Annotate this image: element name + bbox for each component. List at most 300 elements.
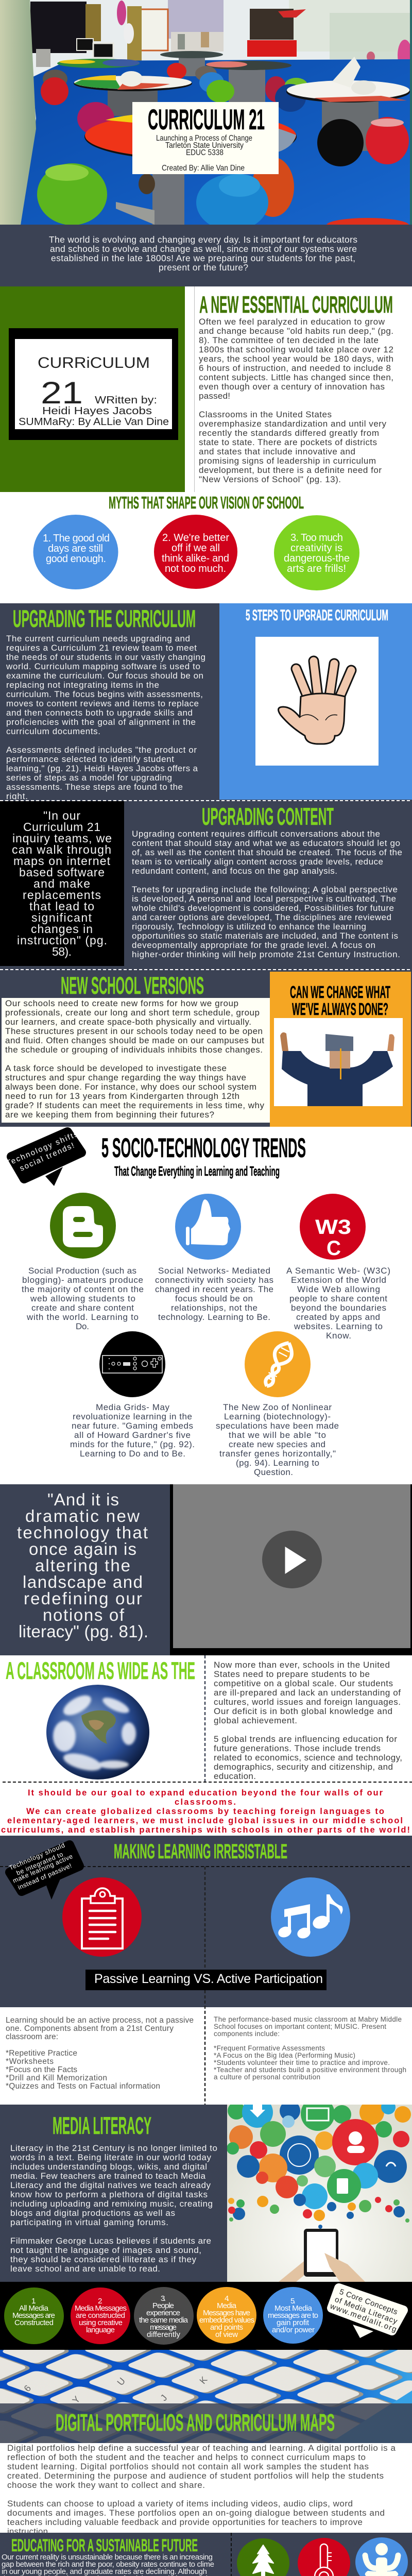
text: passive learning: *Drill and Kill Memorization (6, 2074, 107, 2082)
text: social production: the majority of content on the (22, 1284, 144, 1294)
callout: technology shifts: Technology shifts (5, 1130, 79, 1168)
concept 1: All Media (19, 2304, 49, 2313)
body text: grade? If students can meet the requirements in less time, why (5, 1100, 265, 1110)
icon: blogger (50, 1193, 116, 1259)
panel: digital portfolios keyboard banner: U (115, 2376, 127, 2387)
text: digital portfolios: choose the work they want to collect and share. (7, 2480, 205, 2490)
panel: quote in our curriculum 21: replacements (23, 888, 101, 902)
concept 4 (197, 2287, 256, 2344)
body text: structures and spur change regarding the way things have (5, 1073, 246, 1082)
body text: curriculum. The focus begins with assessments, (6, 689, 203, 699)
callout: technology integrated (8, 1842, 79, 1900)
concept 4: of view (215, 2330, 238, 2339)
panel: 5 steps (219, 603, 412, 800)
callout: 5 core concepts: 5 Core Concepts (338, 2287, 399, 2316)
concept 4: 4. (225, 2294, 229, 2303)
callout: technology integrated: make learning active (12, 1853, 74, 1885)
text: social networks: relationships, not the (171, 1303, 258, 1313)
text: semantic web: A Semantic Web- (W3C) (286, 1266, 390, 1276)
body text: Filmmaker George Lucas believes if students are (10, 2236, 211, 2246)
body text: and career options are developed, The disciplines are reviewed (132, 912, 391, 922)
panel: intro band (0, 225, 412, 286)
panel: quote in our curriculum 21: significant (31, 911, 92, 924)
panel: literacy quote: redefining our (24, 1589, 142, 1608)
body text: 5 global trends are influencing education for (214, 1734, 397, 1744)
concept 1: Messages are (12, 2311, 55, 2320)
callout: global goal (1, 1788, 410, 1835)
myth 3 circle: 3. Too much (290, 532, 343, 544)
text: social production: blogging)- amateurs produce (22, 1275, 143, 1285)
body text: the schedule or grouping of individuals inhibits those changes. (5, 1045, 263, 1055)
body text: the needs of our students in our vastly changing (6, 652, 205, 662)
text: media grids: Learning to Do and to Be. (80, 1449, 185, 1459)
concept 2: 2. (98, 2297, 102, 2306)
myth 2 circle: not too much. (165, 563, 226, 574)
concept 2: using creative (79, 2318, 123, 2327)
body text: competitive on a global scale. Our students (214, 1679, 393, 1688)
book title text: WRitten by: (95, 395, 157, 406)
panel: literacy quote: landscape and (23, 1572, 143, 1591)
body text: replacing not integrating items in the (6, 680, 159, 690)
body text (131, 829, 402, 959)
body text: examine the curriculum. Our focus should be on (6, 671, 203, 681)
media icons image (227, 2097, 412, 2282)
body text: even though over a century of innovation has (199, 382, 385, 392)
callout: global goal: It should be our goal to expand education beyond the four walls of our (28, 1788, 383, 1798)
body text: 6 hours of instruction, and needed to include 8 (199, 363, 391, 373)
text: media grids (70, 1402, 195, 1459)
text: passive learning: *Quizzes and Tests on Factual information (6, 2082, 160, 2091)
text: new zoo: create new species and (229, 1439, 325, 1449)
myth 2 circle (154, 515, 237, 589)
intro text (49, 234, 357, 273)
body text: media. Few teachers are trained to teach Media (10, 2171, 206, 2181)
body text: whole child's development is considered, Possibilities for future (131, 903, 394, 913)
body text (10, 2143, 217, 2274)
panel: quote in our curriculum 21: 58). (52, 945, 72, 958)
icon: w3c: W3 (315, 1216, 351, 1239)
subtitle text: Created By: Allie Van Dine (162, 164, 245, 173)
banner: passive vs active (85, 1970, 327, 1990)
concept 4: Messages have (203, 2309, 250, 2317)
panel: can we change (270, 972, 411, 1127)
concept 3: 3. (161, 2294, 166, 2303)
text: media grids: minds for the future," (pg. 92). (70, 1439, 195, 1449)
body text (1, 2553, 218, 2576)
concept 4: Media (217, 2301, 237, 2310)
body text: series of steps as a model for upgrading (6, 773, 172, 783)
panel: literacy quote (0, 1484, 170, 1655)
myth 1 circle: days are still (48, 543, 103, 554)
panel: quote in our curriculum 21: Curriculum 21 (23, 820, 100, 834)
concept 5 (263, 2287, 323, 2344)
text: new zoo: Learning (biotechnology)- (224, 1412, 331, 1421)
body text: development, but there is a definite need for (199, 465, 382, 475)
panel: media literacy: MEDIA LITERACY (53, 2112, 151, 2139)
concept 5: Most Media (274, 2304, 313, 2313)
text: active participation: *Students volunteer their time to practice and improve. (214, 2059, 390, 2066)
body text: and then connects both to upgrade skills and (6, 708, 193, 718)
callout: 5 core concepts (329, 2287, 403, 2338)
myth 2 circle: off if we all (171, 543, 220, 554)
panel: literacy quote: technology that (17, 1523, 148, 1542)
icon: tree (237, 2538, 289, 2576)
text: active participation: components include: (214, 2030, 280, 2038)
body text: Tenets for upgrading include the following; A global perspective (132, 885, 398, 894)
book title text: Heidi Hayes Jacobs (42, 405, 152, 417)
text: digital portfolios: reflection of both the student and the teacher and helps to connect curriculum maps to (7, 2452, 366, 2462)
panel: quote in our curriculum 21: inquiry teams, we (12, 832, 112, 845)
body text: The current curriculum needs upgrading and (6, 634, 190, 643)
video placeholder (170, 1484, 412, 1655)
text: new zoo: (pg. 94). Learning to (236, 1458, 319, 1468)
body text (214, 1660, 402, 1781)
text: active participation: *Teacher and students build a positive environment through (214, 2066, 406, 2074)
text: digital portfolios: student learning. Digital portfolios should not contain all work samples the student has (7, 2462, 369, 2471)
body text (199, 317, 393, 484)
intro text: established in the late 1800s! Are we preparing our students for the past, (51, 253, 355, 263)
callout: technology integrated: be integrated to (15, 1851, 64, 1877)
body text: rigorously, Technology is utilized to enhance the learning (132, 922, 366, 931)
icon: meditating person (355, 2537, 408, 2576)
text: media grids: Media Grids- May (96, 1402, 170, 1412)
panel: quote in our curriculum 21 (0, 801, 124, 966)
panel: upgrading content (131, 803, 402, 959)
myth 3 circle (274, 515, 359, 590)
concept 2 (71, 2287, 130, 2344)
text: media grids: revoluationize learning in the (73, 1412, 192, 1421)
body text: our learners, and create space-both physically and virtually. (5, 1017, 251, 1027)
body text: learning," (pg. 21). Heidi Hayes Jacobs offers a (6, 764, 198, 773)
body text: professionals, create our long and short term schedule, group (5, 1008, 260, 1018)
text: social production: with the world. Learning to (26, 1312, 139, 1322)
body text: and change because "old habits run deep," (pg. (199, 326, 393, 336)
icon: thumbs up (175, 1194, 241, 1260)
body text: 8). The committee of ten decided in the late (199, 335, 379, 345)
text: active participation: *Frequent Formative Assessments (214, 2044, 325, 2052)
title card (132, 102, 279, 174)
text: social networks: changed in recent years. The (155, 1284, 273, 1294)
icon: music notes (271, 1877, 350, 1957)
text: passive learning: one. Components absent from a 21st Century (6, 2024, 174, 2033)
book title text (19, 354, 169, 428)
text: social production: Social Production (such as (28, 1266, 136, 1276)
book title text: SUMMaRy: By ALLie Van Dine (19, 416, 169, 428)
body text: requires a Curriculum 21 review team to meet (6, 643, 197, 653)
body text: assessments. These steps are found to the (6, 782, 183, 792)
body text: Often we feel paralyzed in education to grow (199, 317, 385, 327)
panel: quote in our curriculum 21: maps on internet (13, 854, 111, 868)
callout: technology integrated: instead of passive! (17, 1862, 73, 1891)
panel: digital portfolios keyboard banner: J (158, 2393, 169, 2403)
myth 2 circle: think alike- and (162, 553, 229, 564)
callout: global goal: classrooms. (175, 1798, 236, 1807)
panel: quote in our curriculum 21: changes in (31, 922, 93, 936)
text: active participation (214, 2015, 406, 2081)
concept 3: differently (147, 2330, 180, 2339)
book title text: CURRiCULUM (38, 354, 150, 371)
body text: These structures present in our schools today need to be open (5, 1026, 263, 1036)
body text: 1800s that schooling would take place over 12 (199, 345, 393, 354)
intro text: and schools to evolve and change as well, since most of our systems were (50, 244, 357, 254)
subtitle text (156, 134, 252, 173)
body text: moves to content reviews and items to replace (6, 699, 199, 708)
icon: clipboard (62, 1877, 142, 1957)
graduate photo (280, 1032, 394, 1106)
text: social networks: technology. Learning to Be. (158, 1312, 270, 1322)
panel: making learning irresistable (0, 1836, 412, 2105)
divider (3, 1782, 412, 1783)
body text: A task force should be developed to investigate these (5, 1063, 227, 1073)
text: social production: Do. (76, 1321, 89, 1331)
panel: 5 core concepts (0, 2282, 412, 2350)
body text: Now more than ever, schools in the United (214, 1660, 390, 1670)
body text: leave school and are unable to read. (10, 2264, 160, 2274)
icon: thermometer (298, 2538, 350, 2576)
text: semantic web: websites. Learning to (294, 1321, 383, 1331)
myth 3 circle: arts are frills! (287, 563, 346, 574)
text: social networks: Social Networks- Mediated (158, 1266, 270, 1276)
body text: future generations. Those include trends (214, 1743, 381, 1753)
text: digital portfolios: instruction. (7, 2527, 50, 2536)
body text: Literacy in the 21st Century is no longer limited to (10, 2143, 217, 2153)
text: digital portfolios: Students can choose to upload a variety of items including videos, audio clips, word (7, 2499, 353, 2509)
body text: "New Versions of School" (pg. 13). (199, 474, 341, 484)
callout: 5 core concepts: of Media Literacy (334, 2295, 399, 2326)
intro text: present or the future? (159, 262, 248, 273)
text: digital portfolios (7, 2443, 396, 2536)
panel: literacy quote: "And it is (47, 1490, 119, 1509)
body text: curriculum documents. (6, 726, 100, 736)
body text: state to state. There are pockets of districts (199, 437, 377, 447)
body text: participating in virtual gaming forums. (10, 2217, 168, 2227)
subtitle text: Tarleton State University (165, 141, 244, 150)
body text: proficiencies with the goal of alignment in the (6, 717, 196, 727)
panel: new school versions (2, 972, 270, 1123)
myth 2 circle: 2. We're better (162, 532, 229, 544)
text: active participation: a culture of personal contribution (214, 2073, 320, 2081)
body text: not taught the language of images and sound, (10, 2245, 201, 2255)
concept 5: 5. (290, 2297, 296, 2306)
text: social networks (155, 1266, 273, 1322)
body text: passed! (199, 391, 230, 401)
panel: quote in our curriculum 21: based software (19, 866, 105, 879)
subtitle text: Launching a Process of Change (156, 134, 252, 143)
title card: CURRICULUM 21 (148, 103, 265, 135)
text: semantic web (286, 1266, 390, 1341)
text: passive learning: *Worksheets (6, 2057, 54, 2066)
concept 2: are constructed (76, 2311, 125, 2320)
text: social networks: focus should be on (175, 1294, 253, 1303)
dark background for content block (0, 800, 412, 1127)
body text (5, 998, 265, 1120)
callout: technology integrated: Technology should (8, 1842, 66, 1872)
concept 2: language (86, 2326, 115, 2334)
text: new zoo: Question. (254, 1467, 293, 1477)
callout: global goal: curriculums, and establish partnerships with schools in other parts of the world! (1, 1825, 410, 1835)
icon: w3c (300, 1194, 366, 1260)
icon: play button (262, 1531, 322, 1588)
text: new zoo: speculations have been made (216, 1421, 339, 1431)
panel: a new essential curriculum (195, 286, 393, 492)
body text: world. Curriculum mapping software is used to (6, 662, 200, 671)
body text: opportunities so static materials are included, and The content is (132, 931, 398, 941)
intro text: The world is evolving and changing every day. Is it important for educators (49, 234, 357, 245)
text: digital portfolios: Digital portfolios help define a successful year of teaching and learning. A digital portfolio is a (7, 2443, 396, 2453)
body text: are ill-prepared and lack an understanding of (214, 1688, 401, 1698)
body text: right. (6, 791, 28, 801)
text: digital portfolios: documents and images. These portfolios open an on-going dialogue between students and (7, 2508, 385, 2518)
icon: game remote (99, 1331, 165, 1397)
text: semantic web: Know. (326, 1331, 351, 1341)
body text: and fluid. Often changes should be made on our campuses but (5, 1036, 264, 1045)
concept 3: People (152, 2301, 174, 2310)
concept 1: Constructed (14, 2318, 54, 2327)
body text: gap between the rich and the poor, obesity rates continue to clime (2, 2560, 214, 2569)
text: passive learning (6, 2016, 194, 2091)
body text: Assessments defined includes "the product or (6, 745, 197, 755)
panel: upgrading the curriculum: UPGRADING THE CURRICULUM (13, 605, 196, 632)
body text: related to economics, science and technology, (214, 1753, 402, 1762)
body text: Our schools need to create new forms for how we group (5, 998, 238, 1008)
panel: quote in our curriculum 21: can walk through (12, 843, 111, 856)
panel: a classroom as wide as the world: A CLASSROOM AS WIDE AS THE (6, 1657, 195, 1684)
body text: they should be considered illiterate as if they (10, 2255, 197, 2264)
concept 4: and points (210, 2323, 243, 2332)
body text: demographics, security and citizenship, and (214, 1762, 393, 1772)
myth 1 circle (33, 515, 118, 589)
text: semantic web: Wide Web allowing (297, 1284, 380, 1294)
body text: Our deficit is in both global knowledge and (214, 1706, 392, 1716)
text: media grids: all of Howard Gardner's five (74, 1430, 191, 1440)
panel: upgrading the curriculum (0, 603, 219, 801)
text: social production: web allowing students to (30, 1294, 135, 1303)
body text: need to run for 13 years from Kindergarten through 12th (5, 1091, 239, 1101)
heading: EDUCATING FOR A SUSTAINABLE FUTURE (11, 2536, 198, 2555)
body text: including uploading and remixing music, creating (10, 2199, 213, 2209)
icon: dna (245, 1331, 311, 1397)
body text: always been done. For instance, why does our school system (5, 1082, 256, 1092)
subtitle text: EDUC 5338 (186, 148, 224, 157)
body text: and states that include innovative and (199, 447, 355, 456)
globe photo (46, 1685, 149, 1780)
panel: media literacy (0, 2105, 227, 2282)
text: semantic web: Extension of the World (291, 1275, 386, 1285)
banner: passive vs active: Passive Learning VS. Active Participation (94, 1972, 323, 1986)
panel: digital portfolios keyboard banner (0, 2350, 412, 2443)
text: social networks: connectivity with society has (155, 1275, 273, 1285)
text: new zoo: that we will be able "to (229, 1430, 326, 1440)
concept 1: 1. (31, 2297, 36, 2306)
divider (0, 969, 412, 970)
callout: 5 core concepts: www.medialit.org (329, 2301, 398, 2334)
concept 3 (134, 2287, 194, 2345)
divider (0, 800, 412, 801)
body text: blogs and digital productions as well as (10, 2208, 175, 2218)
body text: education. (214, 1771, 256, 1781)
text: new zoo: The New Zoo of Nonlinear (223, 1402, 332, 1412)
body text: content that should stay and what we as educators should let go (132, 838, 400, 848)
text: media grids: near future. "Gaming embeds (72, 1421, 193, 1431)
body text: in our young people, and graduate rates are declining. Although (2, 2567, 207, 2576)
body text: overemphasize standardization and until very (199, 419, 386, 429)
body text: recently the standards differed greatly from (199, 428, 379, 438)
text: passive learning: *Repetitive Practice (6, 2049, 77, 2058)
body text: content subjects. Little has changed since then, (199, 372, 393, 382)
callout: technology shifts: social trends! (19, 1141, 76, 1173)
myth 1 circle: good enough. (46, 553, 106, 565)
concept 3: the same media (139, 2316, 188, 2325)
callout: global goal: We can create globalized classrooms by teaching foreign languages to (26, 1807, 384, 1816)
body text: includes understanding blogs, wikis, and digital (10, 2162, 207, 2172)
panel: literacy quote: literacy" (pg. 81). (19, 1622, 148, 1641)
panel: quote in our curriculum 21: and make (33, 877, 90, 890)
text: new zoo (216, 1402, 339, 1477)
panel: quote in our curriculum 21: instruction" (pg. (17, 934, 107, 947)
concept 3: message (150, 2323, 177, 2332)
text: semantic web: created by apps and (296, 1312, 380, 1322)
text: social production: create and share content (31, 1303, 134, 1313)
panel: quote in our curriculum 21: that lead to (29, 900, 94, 913)
text: digital portfolios: teachers including valuable feedback and provide opportunities for teachers to improve (7, 2517, 363, 2527)
book title text: 21 (41, 376, 83, 410)
panel: digital portfolios keyboard banner: 6 (22, 2383, 33, 2394)
panel: digital portfolios keyboard banner: K (197, 2375, 210, 2386)
text: active participation: The performance-based music classroom at Mabry Middle (214, 2015, 402, 2023)
body text: Our current reality is unsustainable because there is an increasing (2, 2553, 213, 2562)
concept 3: experience (146, 2309, 180, 2317)
myth 3 circle: creativity is (290, 543, 342, 554)
body text: is developed, A personal and local perspective is cultivated, The (132, 894, 396, 904)
myth 1 circle: 1. The good old (43, 533, 110, 544)
panel: literacy quote: altering the (35, 1556, 130, 1575)
concept 5: gain profit (277, 2318, 310, 2327)
body text: Upgrading content requires difficult conversations about the (132, 829, 380, 839)
body text: global achievement. (214, 1716, 297, 1725)
concept 1 (4, 2287, 64, 2344)
body text: cultures, world issues and foreign languages. (214, 1697, 401, 1707)
body text: performance selected to identify student (6, 754, 174, 764)
body text: words in a text. Being literate in our world today (10, 2153, 211, 2162)
concept 4: embedded values (199, 2316, 254, 2325)
text: passive learning: Learning should be an active process, not a passive (6, 2016, 194, 2025)
callout: technology shifts (5, 1130, 81, 1186)
callout: global goal: elementary-aged learners, we must include global issues in our middle school (7, 1816, 403, 1825)
body text: promising signs of leadership in curriculum (199, 456, 376, 466)
body text (6, 634, 205, 801)
panel: literacy quote: dramatic new (25, 1506, 140, 1526)
panel: literacy quote: once again is (29, 1539, 136, 1558)
icon: open hand (279, 661, 351, 744)
myth 3 circle: dangerous-the (284, 553, 350, 564)
panel: quote in our curriculum 21: "In our (43, 809, 80, 822)
hero photo: colourful classroom (0, 0, 412, 232)
body text: Classrooms in the United States (199, 410, 332, 419)
body text: are we keeping them from beginning their futures? (5, 1110, 214, 1120)
body text: years, the school year would be 180 days, with (199, 354, 393, 364)
text: semantic web: people to share content (289, 1294, 387, 1303)
text: active participation: *A Focus on the Big Idea (Performing Music) (214, 2052, 355, 2059)
panel: a classroom as wide as the world (6, 1655, 402, 1782)
text: active participation: School focuses on important content; MUSIC. Present (214, 2023, 386, 2030)
panel: 5 socio-technology trends (5, 1130, 390, 1477)
text: digital portfolios: created. Determining the purpose and audience of student portfolios will help the students (7, 2471, 384, 2481)
text: passive learning: classroom are: (6, 2032, 58, 2041)
body text: Literacy and the digital natives we teach already (10, 2180, 211, 2190)
body text: States need to prepare students to be (214, 1669, 370, 1679)
icon: w3c: C (327, 1237, 341, 1260)
body text: of, as well as the content that should be created. The focus of the (132, 848, 402, 857)
